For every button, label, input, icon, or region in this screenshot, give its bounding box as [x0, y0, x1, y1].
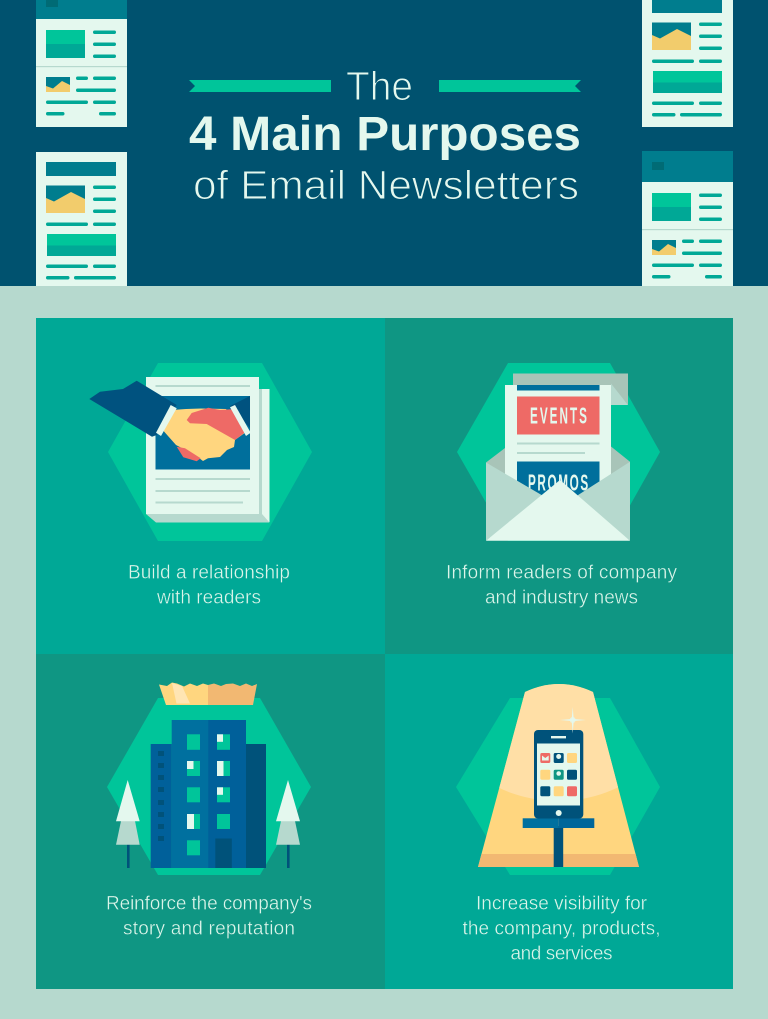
title [189, 63, 581, 208]
hexagon [457, 363, 660, 541]
panel: build a relationship [36, 318, 385, 654]
hexagon [107, 698, 311, 875]
icon: spotlight [478, 684, 639, 867]
caption: Reinforce the company's [106, 894, 312, 914]
icon: left tree [116, 780, 140, 868]
caption [106, 894, 312, 940]
caption: with readers [156, 588, 261, 608]
panel: increase visibility [385, 625, 733, 989]
header background [0, 0, 768, 286]
icon: right tree [276, 780, 300, 868]
icon: envelope with newsletter: EVENTS [530, 402, 589, 429]
newsletter thumbnail: top left [36, 0, 127, 127]
title line: of Email Newsletters: of Email Newsletters [193, 162, 579, 208]
icon: stacked document [146, 377, 270, 522]
caption: and industry news [485, 588, 638, 608]
caption [446, 562, 678, 608]
icon: handshake [89, 381, 251, 461]
newsletter thumbnail: bottom left [36, 152, 127, 290]
caption: and services [510, 944, 612, 964]
promos banner [517, 462, 600, 496]
caption [128, 562, 290, 608]
icon: envelope with newsletter [486, 374, 630, 541]
title line: 4 Main Purposes: 4 Main Purposes [189, 108, 581, 161]
newsletter thumbnail: top right [642, 0, 733, 127]
newsletter thumbnails [36, 0, 733, 290]
panel: inform readers [385, 318, 733, 654]
hexagon [108, 363, 312, 541]
caption: story and reputation [123, 918, 295, 940]
newsletter thumbnail: bottom right [642, 151, 733, 290]
icon: sparkle [560, 707, 586, 734]
panel: reinforce story [36, 654, 385, 989]
title line: The: The [346, 63, 413, 109]
icon: crown of paper [159, 682, 257, 705]
promos banner: PROMOS [528, 469, 590, 496]
caption: Increase visibility for [476, 894, 648, 914]
caption: Inform readers of company [446, 562, 678, 584]
caption: the company, products, [462, 918, 660, 940]
ribbon: left [189, 80, 331, 92]
icon: phone on stand [523, 730, 594, 867]
ribbon: right [439, 80, 581, 92]
icon: building [151, 720, 266, 868]
caption [462, 894, 660, 964]
hexagon [456, 698, 660, 875]
caption: Build a relationship [128, 562, 290, 584]
events banner [517, 396, 600, 434]
